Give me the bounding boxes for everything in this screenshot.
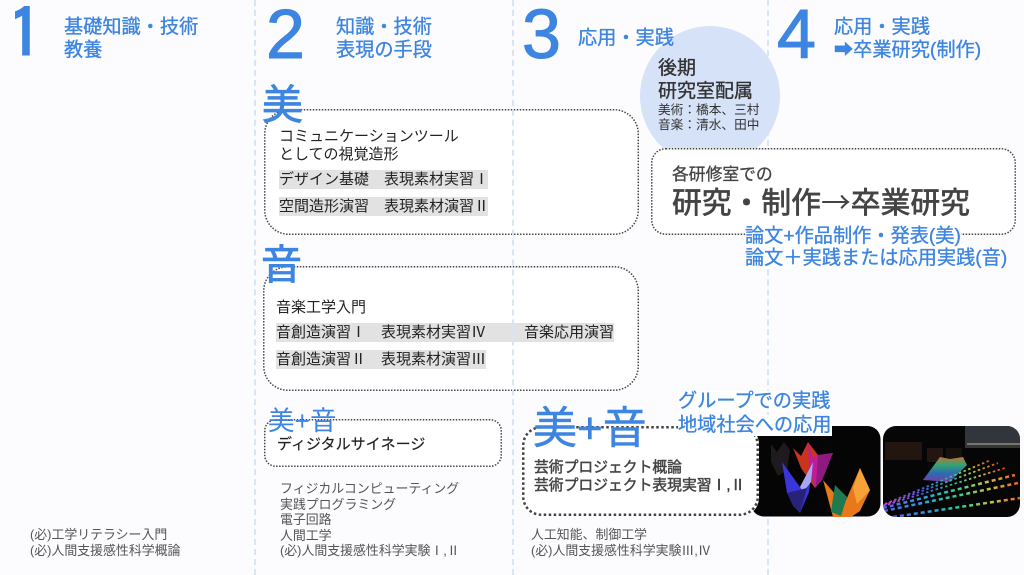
step 4 heading [834,16,981,61]
grade 2 subjects: フィジカルコンピューティング [280,481,459,496]
music course row 1 [276,323,614,342]
music course row 1: 音楽応用演習 [524,324,614,341]
step 2 heading: 知識・技術 [336,17,432,38]
panel: lab research [651,148,1016,235]
group practice callout: グループでの実践 [678,391,830,412]
panel: art project [522,426,759,516]
music course row 2: 音創造演習Ⅱ 表現素材演習Ⅲ [276,351,486,368]
art courses description [279,128,459,163]
photo: rainbow LED installation [883,426,1020,517]
group practice callout: 地域社会への応用 [678,414,832,436]
step 2 heading: 表現の手段 [336,40,432,61]
panel: digital signage [264,419,502,467]
lab members: 音楽：清水、田中 [658,118,760,132]
grade 2 subjects: 電子回路 [280,512,332,527]
grade 1 subjects: (必)工学リテラシー入門 [30,527,167,542]
grade 2 subjects: 人間工学 [280,528,332,543]
graduation research note: 論文+作品制作・発表(美) [745,226,961,247]
art label: 美 [262,82,303,128]
music course row 1: 音創造演習Ⅰ 表現素材実習Ⅳ [276,324,486,341]
art project text: 芸術プロジェクト概論 [534,460,682,476]
art project text [534,459,745,494]
music course intro: 音楽工学入門 [276,299,366,316]
step 1 heading: 教養 [64,40,102,61]
grade 2 subjects: (必)人間支援感性科学実験Ⅰ,Ⅱ [280,543,460,558]
step 4 heading: 応用・実践 [834,17,930,38]
art courses description: としての視覚造形 [279,146,399,163]
lab assignment heading [658,58,753,102]
grade 2 subjects [280,481,460,558]
graduation research note: 論文＋実践または応用実践(音) [745,248,1007,269]
lab assignment heading: 研究室配属 [658,81,753,102]
grade 3 subjects [531,527,711,558]
graduation research note [745,225,1007,269]
step 3 heading: 応用・実践 [578,28,674,49]
step 2 heading [336,16,432,61]
grade 1 subjects [30,527,180,558]
digital signage text: ディジタルサイネージ [277,436,425,453]
panel: music courses [263,266,639,391]
lab members: 美術：橋本、三村 [658,103,760,117]
group practice callout [678,390,832,436]
step 1 heading: 基礎知識・技術 [64,17,198,38]
grade 3 subjects: 人工知能、制御工学 [531,527,647,542]
lab research main text: 研究・制作→卒業研究 [672,178,970,222]
art course row 2: 空間造形演習 表現素材演習Ⅱ [279,198,489,215]
music label: 音 [261,242,302,288]
lab assignment heading: 後期 [658,58,696,79]
grade 1 subjects: (必)人間支援感性科学概論 [30,543,180,558]
grade 3 subjects: (必)人間支援感性科学実験Ⅲ,Ⅳ [531,543,711,558]
step 1 number: 1 [8,0,42,67]
lab members [658,103,760,132]
circle: lab assignment [640,26,780,166]
art plus music label small: 美+音 [268,406,336,436]
art courses description: コミュニケーションツール [279,128,459,145]
step 4 heading: ➡卒業研究(制作) [834,40,981,61]
grade 2 subjects: 実践プログラミング [280,497,396,512]
art project text: 芸術プロジェクト表現実習Ⅰ,Ⅱ [534,478,745,494]
lab research lead text: 各研修室での [672,165,773,184]
panel: art courses [264,109,639,235]
art course row 1: デザイン基礎 表現素材実習Ⅰ [279,171,489,188]
art plus music label large: 美+音 [533,404,647,453]
step 1 heading [64,16,198,61]
photo: illuminated paper flowers [754,426,880,517]
